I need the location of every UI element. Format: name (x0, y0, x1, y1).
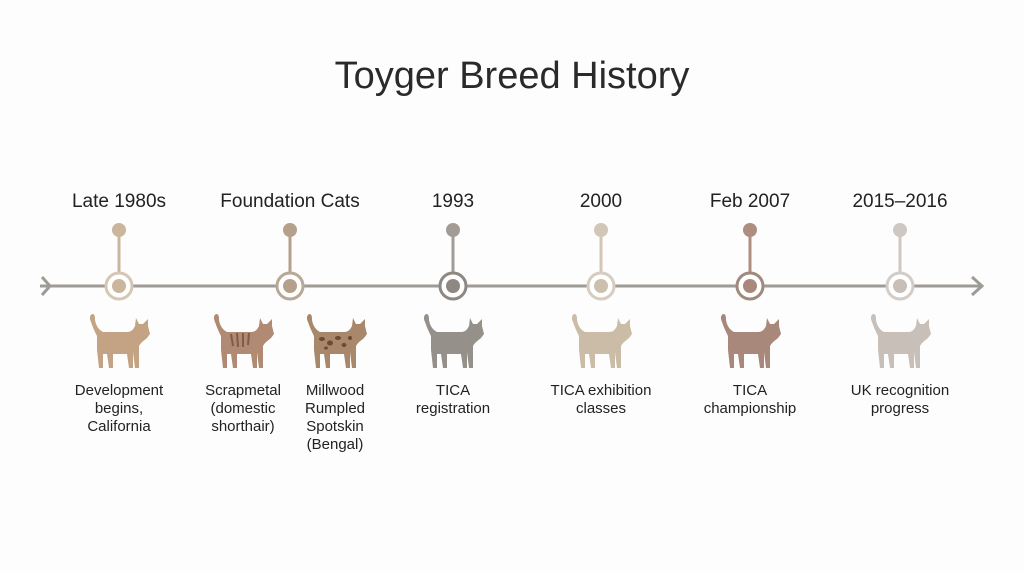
marker: 1993 (440, 223, 466, 299)
icon: cat Millwood (307, 314, 367, 368)
marker: Feb 2007 (737, 223, 763, 299)
icon: cat 2015 (871, 314, 931, 368)
year: 1993: 1993 (432, 191, 474, 212)
year: Foundation Cats: Foundation Cats (220, 191, 360, 212)
timeline axis arrow (40, 277, 982, 295)
desc: 2000: TICA exhibition classes (551, 382, 651, 417)
marker: Late 1980s (106, 223, 132, 299)
year: Feb 2007: Feb 2007 (710, 191, 790, 212)
icon: cat Scrapmetal (214, 314, 274, 368)
icon: cat 1993 (424, 314, 484, 368)
year: 2000: 2000 (580, 191, 622, 212)
desc: Scrapmetal: Scrapmetal (domestic shorthair) (205, 382, 281, 435)
marker: 2000 (588, 223, 614, 299)
marker: Foundation (277, 223, 303, 299)
year: 2015–2016: 2015–2016 (852, 191, 948, 212)
title: Toyger Breed History (335, 55, 689, 97)
desc: 2007: TICA championship (704, 382, 796, 417)
icon: cat 1 (90, 314, 150, 368)
marker: 2015-2016 (887, 223, 913, 299)
year: Late 1980s: Late 1980s (72, 191, 166, 212)
desc: Late 1980s: Development begins, California (75, 382, 163, 435)
icon: cat 2000 (572, 314, 632, 368)
desc: 2015: UK recognition progress (851, 382, 949, 417)
icon: cat 2007 (721, 314, 781, 368)
desc: Millwood: Millwood Rumpled Spotskin (Bengal) (305, 382, 365, 453)
desc: 1993: TICA registration (416, 382, 490, 417)
